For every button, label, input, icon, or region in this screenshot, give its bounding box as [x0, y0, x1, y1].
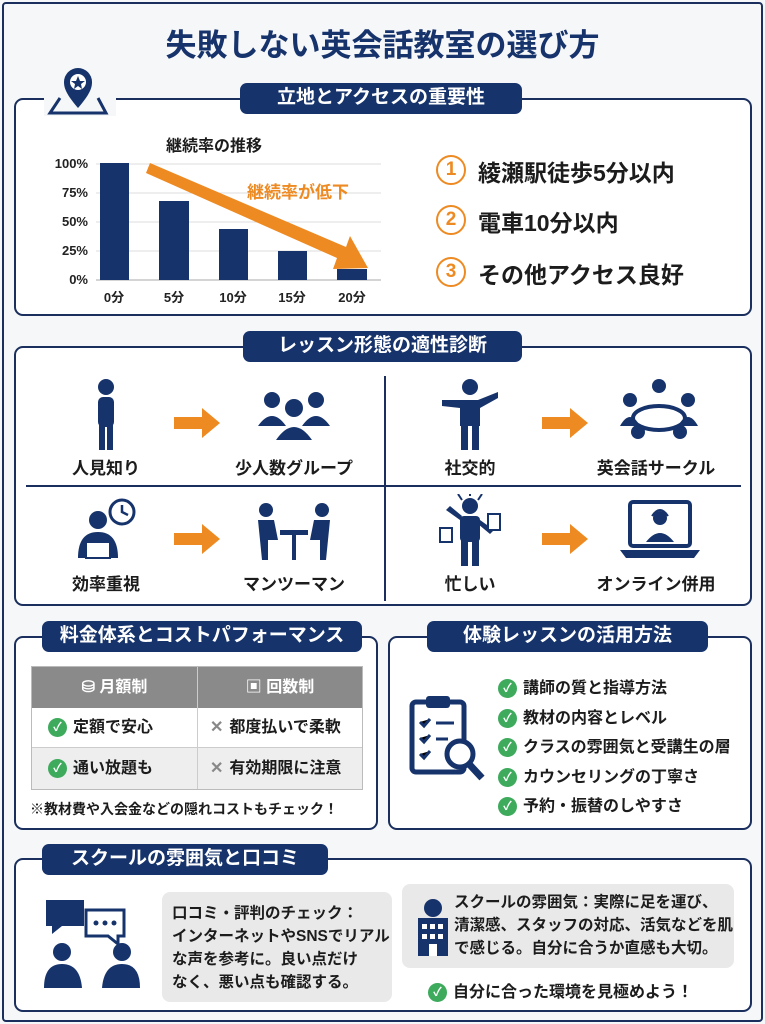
icon: map pin	[44, 68, 116, 116]
bar chart: 15分	[278, 290, 306, 305]
bar chart: 75%	[62, 185, 88, 200]
bar chart: 5分	[164, 290, 184, 305]
checklist: カウンセリングの丁寧さ	[523, 768, 699, 786]
panel: location and access: 電車10分以内	[478, 210, 619, 236]
checklist: ✓	[503, 799, 512, 813]
panel: location and access: 綾瀬駅徒歩5分以内	[478, 160, 675, 186]
icon: online laptop	[620, 500, 700, 558]
panel: location and access: その他アクセス良好	[478, 262, 684, 288]
pill: atmosphere: スクールの雰囲気と口コミ	[71, 848, 299, 869]
panel: lesson format: オンライン併用	[596, 575, 716, 594]
callout: reviews: な声を参考に。良い点だけ	[172, 951, 358, 968]
icon: circle meeting	[620, 379, 698, 439]
checklist: 講師の質と指導方法	[523, 680, 667, 697]
pill: lesson format	[243, 331, 522, 362]
pill: atmosphere	[42, 844, 328, 875]
chart title: 継続率の推移	[166, 138, 262, 155]
callout: atmosphere	[402, 884, 734, 968]
panel: lesson format: 効率重視	[72, 575, 140, 594]
panel: pricing	[14, 636, 378, 830]
table	[31, 666, 363, 790]
panel: lesson format	[14, 346, 752, 606]
panel: lesson format: マンツーマン	[243, 575, 345, 594]
icon: clipboard	[410, 696, 484, 780]
icon: efficient worker	[78, 498, 136, 559]
table: ✓	[53, 720, 62, 734]
pill: lesson format: レッスン形態の適性診断	[278, 335, 487, 356]
callout: reviews: 口コミ・評判のチェック：	[172, 905, 358, 922]
callout: atmosphere: スクールの雰囲気：実際に足を運び、	[454, 894, 718, 911]
panel: location and access	[14, 98, 752, 316]
arrow	[146, 163, 368, 269]
callout: atmosphere: で感じる。自分に合うか直感も大切。	[454, 940, 718, 957]
pill: trial: 体験レッスンの活用方法	[463, 625, 672, 646]
panel: lesson format: 忙しい	[444, 575, 496, 594]
icon: busy person	[439, 494, 501, 566]
table: ✓	[53, 761, 62, 775]
icon: one to one	[258, 503, 330, 560]
title: 失敗しない英会話教室の選び方	[166, 28, 600, 63]
list: access	[436, 155, 466, 185]
table: ▣ 回数制	[246, 679, 314, 696]
callout: reviews	[162, 892, 392, 1002]
checklist: ✓	[503, 740, 512, 754]
panel: lesson format: 人見知り	[72, 459, 140, 478]
icon: social person	[442, 379, 498, 450]
bar chart: 0%	[69, 272, 88, 287]
panel: atmosphere	[14, 858, 752, 1012]
conclusion: ✓	[433, 985, 442, 999]
bar chart: 100%	[55, 156, 88, 171]
bar chart: 25%	[62, 243, 88, 258]
icon: building	[418, 899, 448, 956]
table: 通い放題も	[73, 760, 153, 777]
table: ✕ 有効期限に注意	[210, 760, 341, 777]
panel: trial lesson	[388, 636, 752, 830]
icon: conversation	[44, 900, 140, 988]
checklist: 予約・振替のしやすさ	[523, 798, 683, 815]
checklist	[498, 679, 731, 816]
checklist: ✓	[503, 681, 512, 695]
bar chart	[55, 156, 381, 305]
bar chart: 50%	[62, 214, 88, 229]
list: access: 1	[446, 159, 456, 180]
table: 定額で安心	[73, 719, 153, 736]
callout: atmosphere: 清潔感、スタッフの対応、活気などを肌	[454, 917, 733, 934]
pill: location: 立地とアクセスの重要性	[277, 87, 485, 108]
checklist: ✓	[503, 711, 512, 725]
pill: pricing	[42, 621, 362, 652]
table: ⛁ 月額制	[82, 679, 147, 696]
pill: pricing: 料金体系とコストパフォーマンス	[60, 625, 344, 646]
pill: trial	[427, 621, 708, 652]
panel: location and access: 3	[446, 261, 456, 282]
bar chart: 20分	[338, 290, 366, 305]
panel: lesson format: 社交的	[444, 459, 496, 478]
panel: location and access: 2	[446, 209, 456, 230]
panel: lesson format: 少人数グループ	[235, 459, 353, 478]
conclusion: 自分に合った環境を見極めよう！	[453, 984, 693, 1001]
arrow	[174, 408, 220, 438]
note: ※教材費や入会金などの隠れコストもチェック！	[30, 801, 338, 817]
callout: reviews: なく、悪い点も確認する。	[172, 974, 358, 991]
bar chart: 継続率が低下	[247, 182, 349, 202]
bar chart: 10分	[219, 290, 247, 305]
pill: location	[240, 83, 522, 114]
callout: reviews: インターネットやSNSでリアル	[172, 928, 390, 945]
icon: shy person	[98, 379, 114, 450]
bar chart: 0分	[104, 290, 124, 305]
icon: group	[258, 392, 330, 440]
panel: lesson format: 英会話サークル	[597, 459, 715, 478]
table: ✕ 都度払いで柔軟	[210, 719, 341, 736]
checklist: ✓	[503, 770, 512, 784]
checklist: クラスの雰囲気と受講生の層	[523, 739, 731, 756]
checklist: 教材の内容とレベル	[523, 710, 667, 726]
